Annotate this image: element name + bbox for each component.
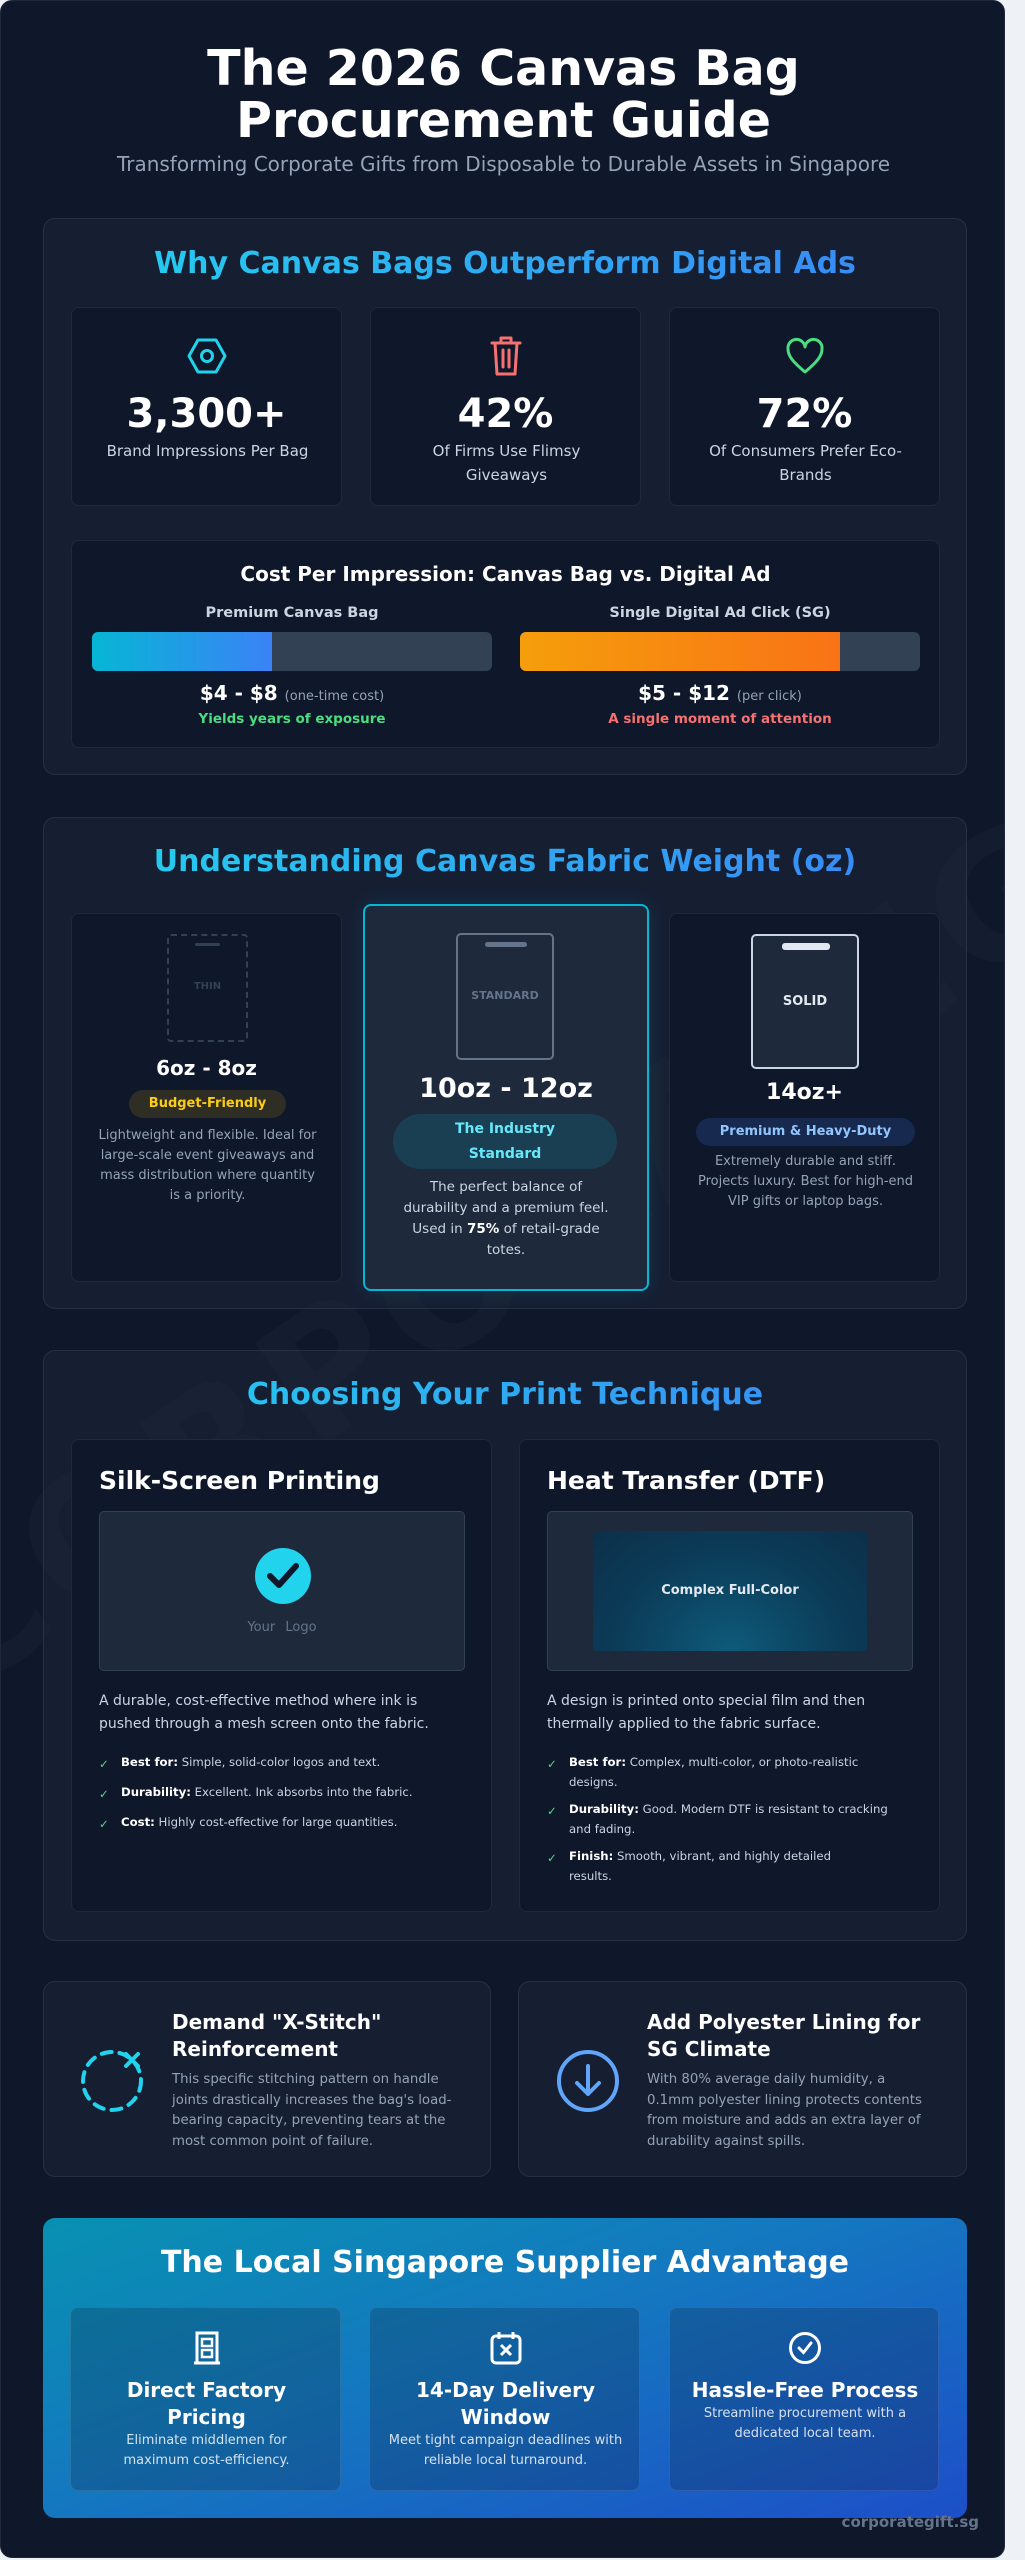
bar: canvas bag: $4 - $8 (one-time cost) xyxy=(200,681,384,705)
illustration: logo xyxy=(99,1511,465,1671)
icon: hexagon xyxy=(188,338,226,374)
bullet list: ✓ xyxy=(99,1787,109,1801)
panel: why canvas bags outperform xyxy=(43,218,967,775)
subtitle: Transforming Corporate Gifts from Disposable to Durable Assets in Singapore xyxy=(117,152,890,176)
heading: Why Canvas Bags Outperform Digital Ads xyxy=(154,246,856,281)
bullet list: Finish: Smooth, vibrant, and highly detailed results. xyxy=(569,1849,831,1883)
bullet list: ✓ xyxy=(547,1851,557,1865)
card: heat transfer xyxy=(519,1439,940,1912)
bar: digital ad: Single Digital Ad Click (SG) xyxy=(609,605,831,621)
icon: standard bag xyxy=(456,933,554,1060)
tip title: Demand "X-Stitch" Reinforcement xyxy=(172,2010,381,2061)
panel: local supplier advantage xyxy=(43,2218,967,2518)
panel: print technique xyxy=(43,1350,967,1941)
description: The perfect balance of durability and a premium feel. Used in 75% of retail-grade totes. xyxy=(403,1179,609,1258)
card title: Silk-Screen Printing xyxy=(99,1466,380,1495)
label: Brand Impressions Per Bag xyxy=(107,442,308,460)
bar: canvas bag: Premium Canvas Bag xyxy=(205,605,379,621)
card text: Meet tight campaign deadlines with reliable local turnaround. xyxy=(389,2433,622,2468)
footer: brand: corporategift.sg xyxy=(842,2513,979,2531)
card: factory pricing xyxy=(70,2307,341,2491)
weight label: 14oz+ xyxy=(766,1080,843,1105)
pill: premium: Premium & Heavy-Duty xyxy=(720,1124,891,1139)
tip text: With 80% average daily humidity, a xyxy=(647,2072,885,2087)
card: 14oz+ xyxy=(669,913,940,1282)
bar: canvas bag: Yields years of exposure xyxy=(198,711,386,727)
heading: Choosing Your Print Technique xyxy=(247,1377,763,1412)
bullet list: Durability: Excellent. Ink absorbs into the fabric. xyxy=(121,1785,413,1799)
card: 10oz-12oz (highlighted) xyxy=(363,904,649,1291)
icon: thin bag xyxy=(167,934,248,1042)
icon: solid bag xyxy=(751,934,859,1069)
card: delivery window xyxy=(369,2307,640,2491)
title: Procurement Guide xyxy=(236,92,771,149)
bullet list: ✓ xyxy=(99,1757,109,1771)
pill: industry standard xyxy=(393,1114,617,1169)
weight label: 6oz - 8oz xyxy=(156,1056,257,1080)
weight label: 10oz - 12oz xyxy=(419,1073,593,1104)
bullet list: Cost: Highly cost-effective for large quantities. xyxy=(121,1815,397,1829)
tip: x-stitch xyxy=(43,1981,491,2177)
pill: premium xyxy=(696,1118,915,1146)
icon: heart xyxy=(786,338,824,374)
panel: fabric weight xyxy=(43,817,967,1309)
description: A durable, cost-effective method where ink is pushed through a mesh screen onto the fabric. xyxy=(99,1693,429,1732)
title: The 2026 Canvas Bag xyxy=(207,40,800,97)
card title: Heat Transfer (DTF) xyxy=(547,1466,825,1495)
icon: trash xyxy=(490,336,522,376)
stat card: flimsy giveaways xyxy=(370,307,641,506)
heading: Understanding Canvas Fabric Weight (oz) xyxy=(154,844,856,879)
bullet list: Durability: Good. Modern DTF is resistant to cracking and fading. xyxy=(569,1802,888,1836)
illustration: full color xyxy=(547,1511,913,1671)
icon: check circle xyxy=(789,2332,821,2364)
label: Of Firms Use Flimsy Giveaways xyxy=(433,442,580,484)
stat card: eco brands xyxy=(669,307,940,506)
bullet list xyxy=(547,1755,888,1883)
pill: budget-friendly xyxy=(129,1090,286,1118)
bar: canvas bag xyxy=(92,605,492,727)
card title: Hassle-Free Process xyxy=(692,2378,918,2402)
bar: digital ad: A single moment of attention xyxy=(608,711,832,727)
pill: budget-friendly: Budget-Friendly xyxy=(149,1096,266,1111)
tip text: This specific stitching pattern on handle joints drastically increases the bag's load-bearing capacity, preventing tears at the most common point of failure. xyxy=(172,2072,451,2148)
bullet list: ✓ xyxy=(99,1817,109,1831)
icon: standard bag: STANDARD xyxy=(471,989,539,1002)
bullet list: Best for: Complex, multi-color, or photo-realistic designs. xyxy=(569,1755,858,1789)
icon: thin bag: THIN xyxy=(194,981,221,992)
number: 72% xyxy=(757,391,852,437)
tip text: 0.1mm polyester lining protects contents from moisture and adds an extra layer of durability against spills. xyxy=(647,2092,922,2148)
heading: The Local Singapore Supplier Advantage xyxy=(161,2245,849,2280)
number: 42% xyxy=(458,391,553,437)
chart title: Cost Per Impression: Canvas Bag vs. Digital Ad xyxy=(240,562,771,586)
bullet list xyxy=(99,1755,413,1831)
description: A design is printed onto special film and then thermally applied to the fabric surface. xyxy=(547,1693,865,1732)
icon: calendar xyxy=(490,2332,522,2364)
heading xyxy=(44,1377,966,1413)
title xyxy=(207,40,800,149)
icon: building xyxy=(194,2332,220,2364)
bullet list: ✓ xyxy=(547,1804,557,1818)
pill: industry standard: The Industry xyxy=(455,1121,555,1137)
pill: industry standard: Standard xyxy=(469,1146,541,1162)
tip: polyester lining xyxy=(518,1981,967,2177)
illustration: full color: Complex Full-Color xyxy=(661,1583,799,1598)
bar: digital ad xyxy=(520,605,920,727)
label: Of Consumers Prefer Eco-Brands xyxy=(709,442,902,484)
illustration: logo: Your Logo xyxy=(247,1620,317,1635)
bullet list: Best for: Simple, solid-color logos and text. xyxy=(121,1755,380,1769)
card title: Direct Factory Pricing xyxy=(127,2378,286,2429)
card: 6oz-8oz xyxy=(71,913,342,1282)
icon: solid bag: SOLID xyxy=(783,994,827,1009)
description: Lightweight and flexible. Ideal for large-scale event giveaways and mass distribution where quantity is a priority. xyxy=(98,1128,317,1203)
card: hassle-free xyxy=(669,2307,939,2491)
card text: Streamline procurement with a dedicated local team. xyxy=(704,2406,906,2441)
card title: 14-Day Delivery Window xyxy=(416,2378,595,2429)
description: Extremely durable and stiff. Projects luxury. Best for high-end VIP gifts or laptop bags. xyxy=(698,1154,913,1209)
stat card: impressions xyxy=(71,307,342,506)
card: silk-screen xyxy=(71,1439,492,1912)
icon: circle arrow down xyxy=(557,2050,619,2112)
number: 3,300+ xyxy=(126,391,287,437)
bullet list: ✓ xyxy=(547,1757,557,1771)
bar: digital ad: $5 - $12 (per click) xyxy=(638,681,802,705)
cost comparison chart xyxy=(71,540,940,748)
icon: dashed circle with x xyxy=(81,2050,143,2112)
tip title: Add Polyester Lining for SG Climate xyxy=(647,2010,920,2061)
card text: Eliminate middlemen for maximum cost-efficiency. xyxy=(124,2433,289,2468)
